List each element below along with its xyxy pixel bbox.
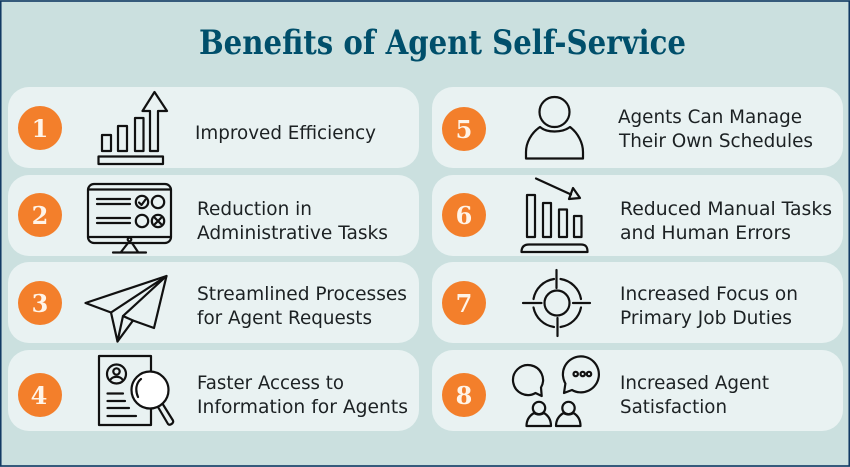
panel: 5 manage schedules [432,87,843,168]
icon: monitor with checklist [88,184,171,252]
label: Satisfaction [620,397,727,418]
label: Agents Can Manage [618,107,802,128]
label [620,284,798,329]
number badge 1: 1 [32,114,48,143]
label: Reduced Manual Tasks [620,199,832,220]
number badge 7: 7 [456,289,472,318]
label: Faster Access to [197,373,344,394]
panel: 8 agent satisfaction [432,350,843,431]
label: Streamlined Processes [197,284,407,305]
number badge 2 [18,193,62,237]
number badge 5: 5 [456,115,472,144]
icon: person [526,97,583,158]
label: Information for Agents [197,397,408,418]
icon: falling bar chart [522,178,588,252]
panel: 2 administrative tasks [8,175,419,256]
title: Benefits of Agent Self-Service [199,23,686,63]
icon: rising bar chart [98,92,167,164]
label: and Human Errors [620,223,791,244]
number badge 8: 8 [456,381,472,410]
icon: document with magnifier [99,356,173,425]
panel: 7 increased focus [432,262,843,343]
panel: 3 streamlined processes [8,262,419,343]
number badge 6: 6 [456,201,472,230]
label: Improved Efficiency [195,123,376,144]
label [620,199,832,244]
label [618,107,813,152]
number badge 4 [18,373,62,417]
number badge 7 [442,281,486,325]
label [620,373,769,418]
label [197,284,407,329]
number badge 5 [442,107,486,151]
label [197,373,408,418]
number badge 8 [442,373,486,417]
number badge 1 [18,106,62,150]
icon: two people with speech bubbles [513,356,599,426]
icon: paper plane [86,276,166,342]
label [197,199,388,244]
panel: 6 reduced manual tasks [432,175,843,256]
label: Reduction in [197,199,312,220]
label: Increased Agent [620,373,769,394]
label: for Agent Requests [197,308,372,329]
number badge 4: 4 [31,381,47,410]
number badge 6 [442,193,486,237]
label: Primary Job Duties [620,308,792,329]
icon: target crosshair [523,270,590,336]
number badge 3 [18,281,62,325]
label: Increased Focus on [620,284,798,305]
number badge 2: 2 [32,201,48,230]
number badge 3: 3 [32,289,48,318]
label: Administrative Tasks [197,223,388,244]
panel: 4 faster access [8,350,419,431]
panel: 1 improved efficiency [8,87,419,168]
label: Their Own Schedules [618,131,813,152]
